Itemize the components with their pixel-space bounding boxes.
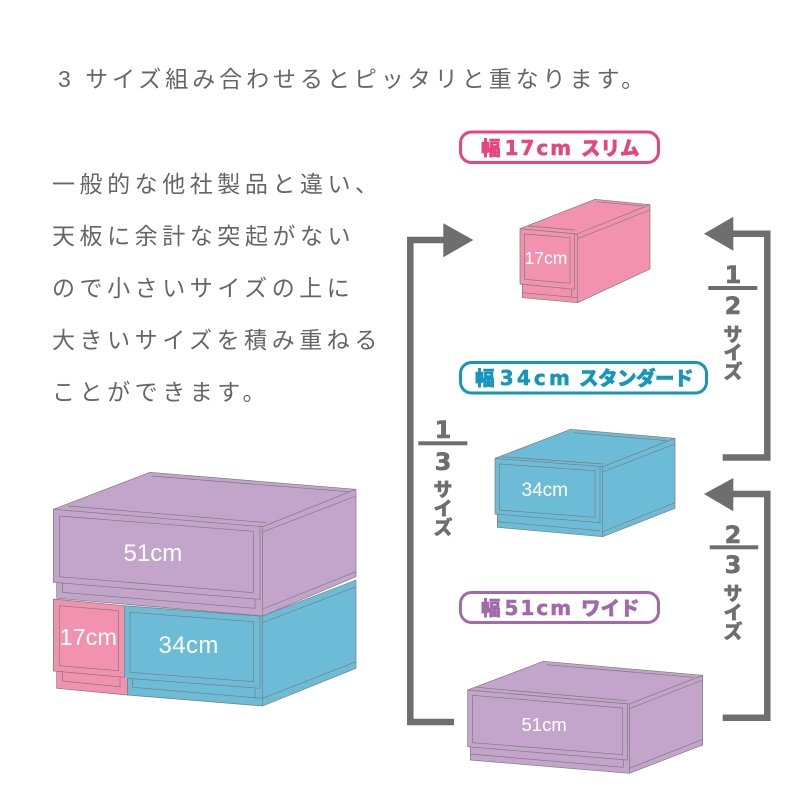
- body text block: ので小さいサイズの上に: [52, 275, 354, 301]
- fraction: 1/2 size: 1: [725, 261, 741, 289]
- fraction: 1/3 size: 3: [435, 448, 451, 476]
- fraction: 1/3 size: イ: [433, 494, 453, 521]
- fraction: 1/2 size: [708, 261, 757, 384]
- arrow: wide to slim, 1/3 size: [410, 223, 473, 722]
- body text block: [52, 171, 383, 405]
- size label: 17cm: 17cm: [60, 624, 117, 650]
- arrow: standard to slim, 1/2 size: [704, 217, 767, 458]
- size label: 17cm: [524, 248, 567, 268]
- teal box in stack: [124, 580, 356, 706]
- fraction: 2/3 size: イ: [723, 598, 743, 625]
- body text block: 一般的な他社製品と違い、: [52, 171, 383, 197]
- size label: 51cm: 51cm: [124, 540, 182, 567]
- fraction: 2/3 size: 3: [725, 551, 741, 579]
- fraction: 2/3 size: [710, 521, 758, 644]
- fraction: 1/2 size: イ: [723, 338, 743, 365]
- fraction: 1/2 size: ズ: [723, 357, 743, 384]
- fraction: 1/3 size: [418, 416, 467, 540]
- fraction: 2/3 size: サ: [723, 579, 743, 606]
- box: 34cm standard: [495, 429, 675, 537]
- size label: 34cm: [522, 480, 568, 501]
- pill label: 17cm slim: 幅17cm スリム: [481, 132, 640, 161]
- pink box in stack: [53, 599, 127, 695]
- fraction: 1/3 size: 1: [435, 416, 451, 444]
- box: 17cm slim: [520, 199, 650, 303]
- arrow: wide to standard, 2/3 size: [704, 478, 767, 718]
- size label: 34cm: 34cm: [158, 632, 219, 659]
- box: 51cm wide: [468, 661, 703, 773]
- fraction: 2/3 size: ズ: [723, 617, 743, 644]
- pill label: 34cm standard: 幅34cm スタンダード: [475, 362, 693, 391]
- body text block: 大きいサイズを積み重ねる: [52, 327, 382, 353]
- fraction: 1/2 size: 2: [725, 292, 741, 320]
- fraction: 1/2 size: サ: [723, 320, 743, 347]
- heading: 3 サイズ組み合わせるとピッタリと重なります。: [58, 66, 648, 92]
- body text block: ことができます。: [52, 379, 270, 405]
- body text block: 天板に余計な突起がない: [52, 223, 355, 249]
- fraction: 1/3 size: サ: [433, 475, 453, 502]
- fraction: 2/3 size: 2: [725, 521, 741, 549]
- stacked boxes illustration: [53, 472, 356, 706]
- purple box in stack: [53, 472, 356, 616]
- size label: 51cm: [522, 714, 567, 735]
- pill label: 51cm wide: 幅51cm ワイド: [481, 592, 640, 621]
- fraction: 1/3 size: ズ: [433, 513, 453, 540]
